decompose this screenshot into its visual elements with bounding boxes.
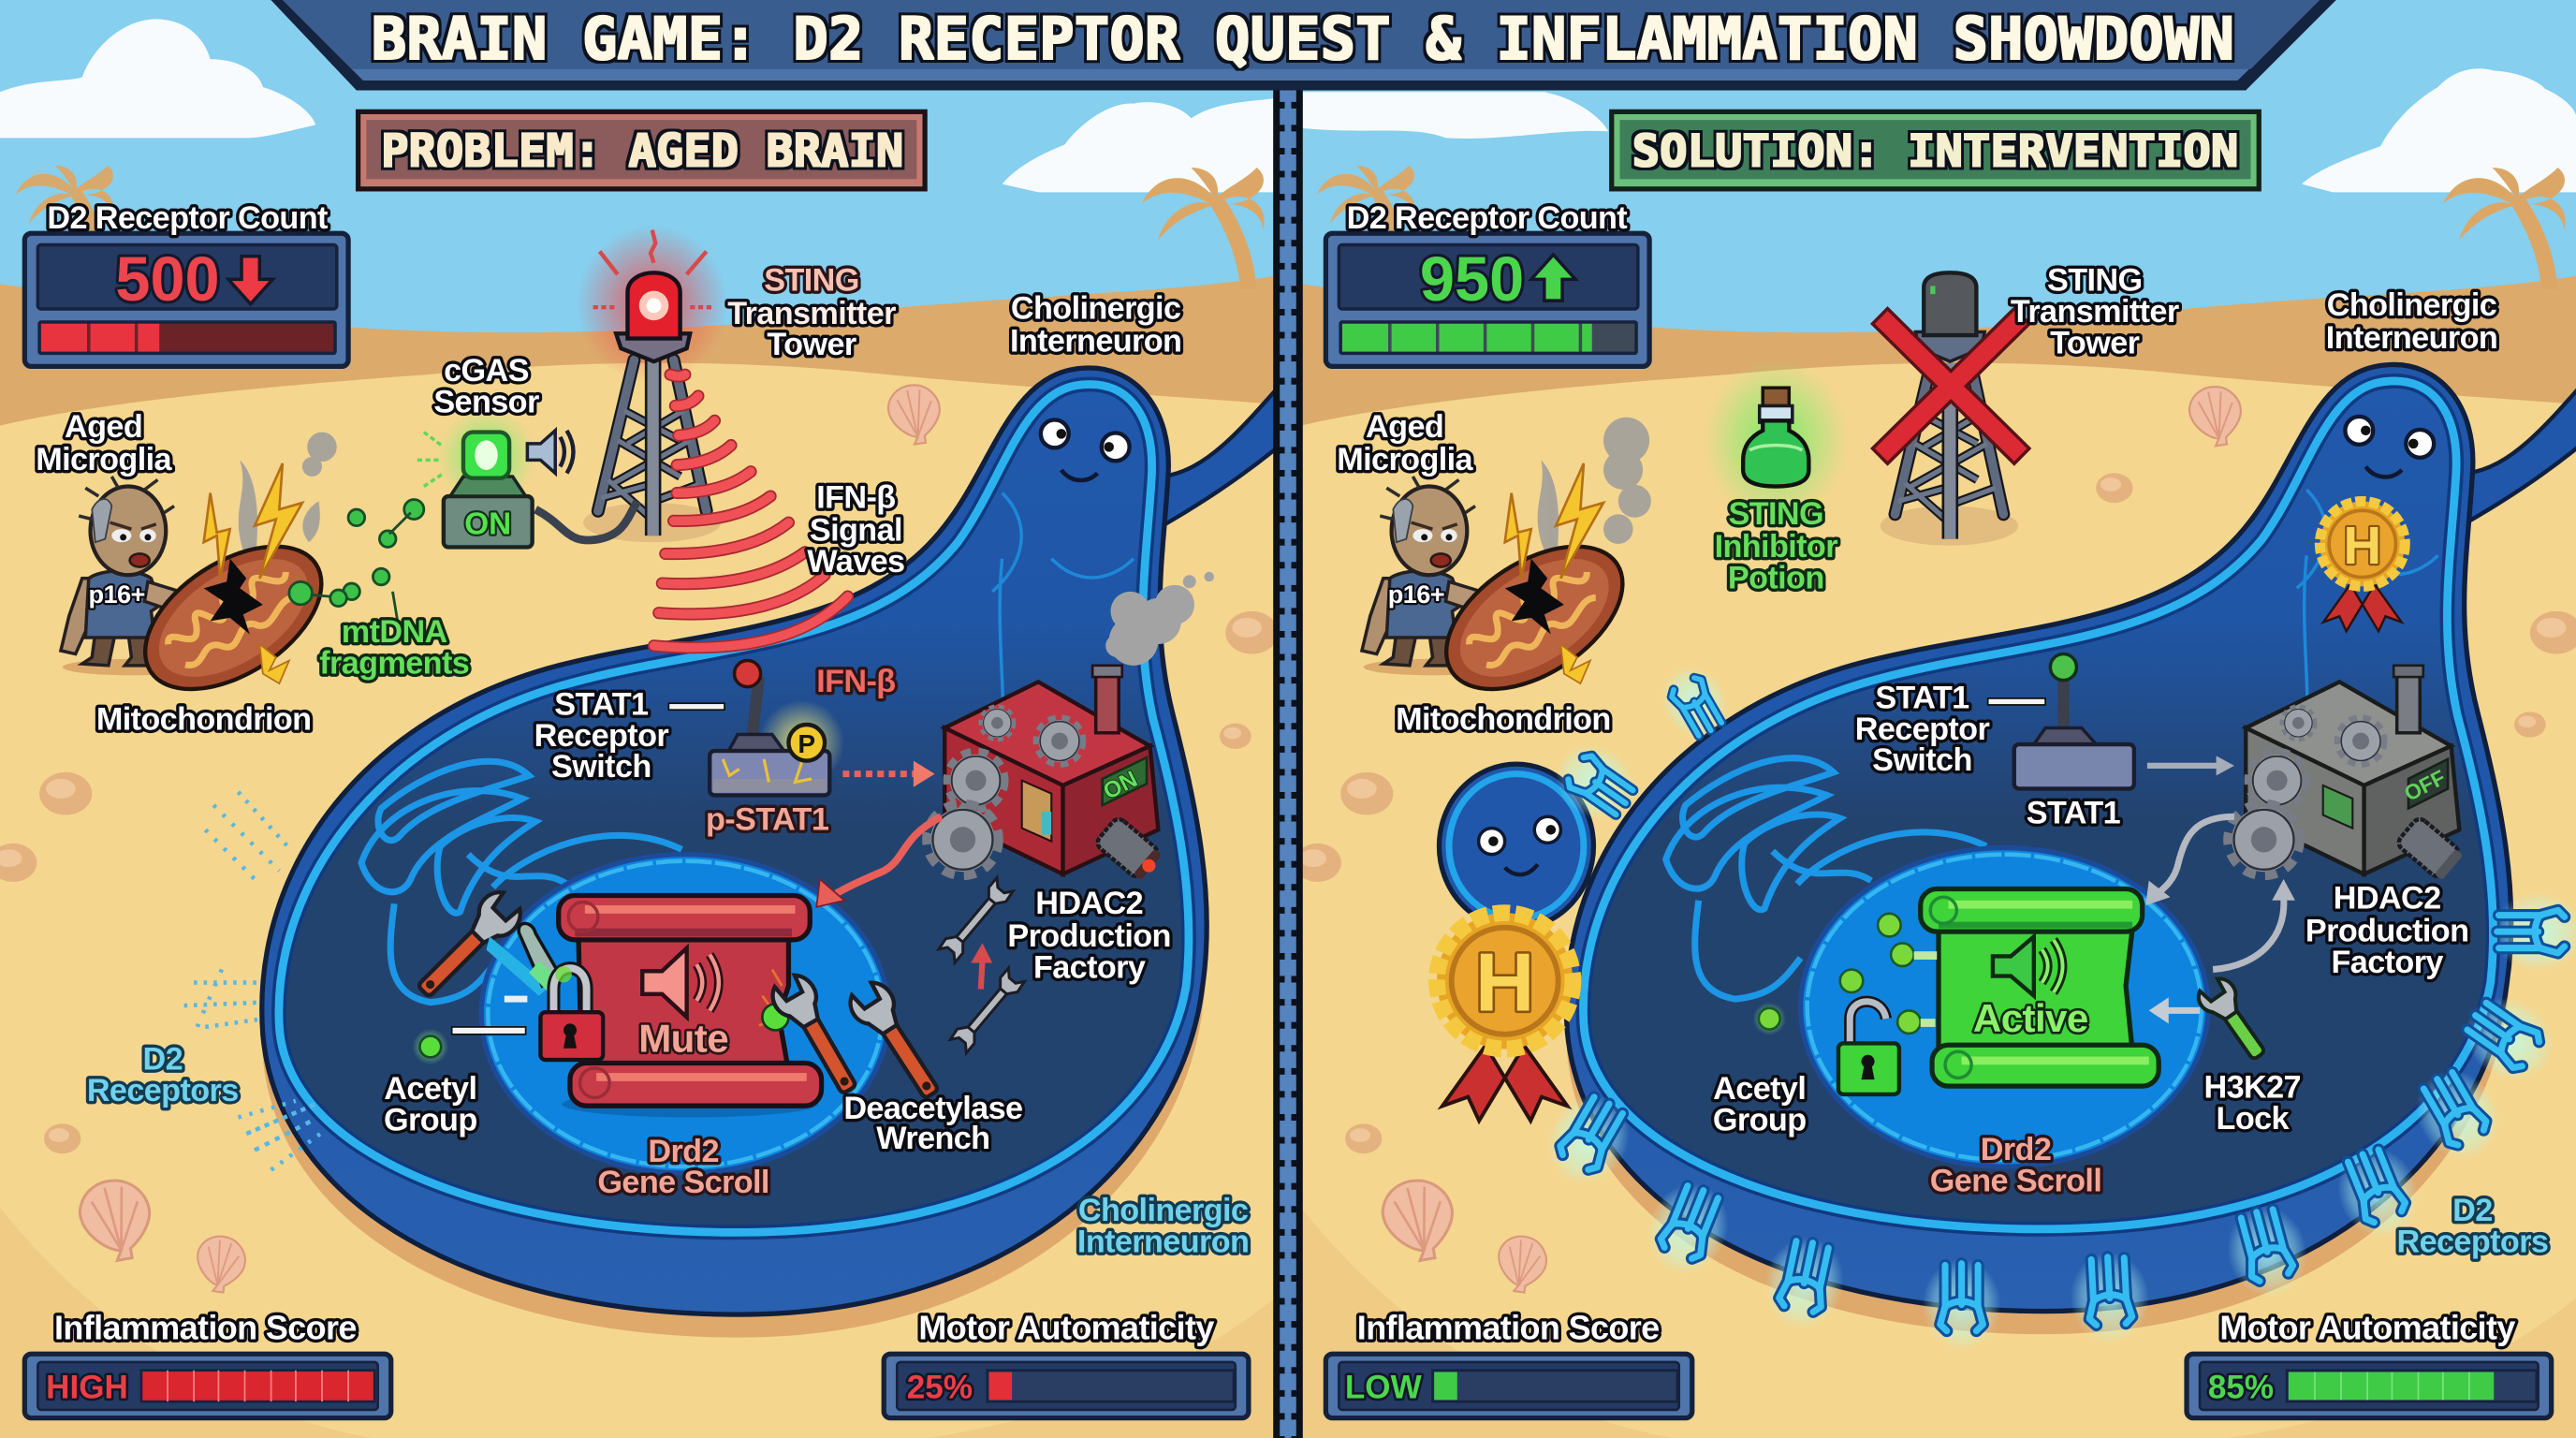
label: D2 receptors, left bbox=[87, 1042, 239, 1108]
label: cGAS sensor: cGAS bbox=[444, 353, 529, 389]
label: acetyl group, left: Group bbox=[384, 1103, 477, 1138]
label: IFN signal waves: IFN-β bbox=[816, 479, 896, 515]
shells and pebbles, right bbox=[1294, 384, 2576, 1295]
value: 950 bbox=[1420, 245, 1524, 315]
label: D2 receptors, right: Receptors bbox=[2397, 1224, 2548, 1259]
label: aged microglia, right: Aged bbox=[1366, 409, 1443, 445]
banner: solution bbox=[1612, 111, 2259, 189]
label: deacetylase wrench: Deacetylase bbox=[843, 1091, 1022, 1126]
smoke: left bbox=[239, 433, 337, 550]
D2 count panel: left bbox=[24, 233, 348, 366]
label: aged microglia, left: Microglia bbox=[36, 442, 172, 477]
up arrow bbox=[1531, 255, 1575, 301]
label: acetyl group, right: Group bbox=[1713, 1103, 1807, 1138]
small neuron: right bbox=[1439, 764, 1593, 929]
acetyl group dot: left bbox=[413, 1029, 448, 1064]
palm tree, left panel near bbox=[1142, 168, 1265, 289]
mitochondrion: right bbox=[1421, 463, 1647, 718]
label: STAT1 receptor switch, right: Receptor bbox=[1855, 712, 1989, 747]
level text: LOW bbox=[1345, 1370, 1423, 1406]
label: STING tower, right bbox=[2011, 263, 2179, 360]
section divider bbox=[1273, 82, 1303, 1438]
microglia character: right bbox=[1362, 477, 1501, 675]
label: cholinergic interneuron, left bottom: Interneuron bbox=[1077, 1224, 1249, 1259]
mitochondrion: left bbox=[120, 463, 346, 718]
label: STAT1 receptor switch, right: Switch bbox=[1872, 742, 1972, 778]
motor label: right: Motor Automaticity bbox=[2219, 1308, 2515, 1346]
STING tower deactivated: right bbox=[1881, 272, 2018, 546]
grey arrow STAT1 to factory bbox=[2147, 756, 2234, 775]
label: STAT1 receptor switch, right: STAT1 bbox=[1875, 680, 1969, 715]
label: H3K27 lock bbox=[2204, 1069, 2301, 1137]
label: cholinergic interneuron, left top bbox=[1010, 290, 1181, 360]
label: D2 receptors, left: D2 bbox=[142, 1042, 183, 1078]
label: IFN signal waves: Signal bbox=[810, 512, 902, 548]
title text: BRAIN GAME: D2 RECEPTOR QUEST & INFLAMMATION SHOWDOWN bbox=[372, 5, 2234, 73]
red arrow factory to scroll bbox=[816, 816, 942, 907]
medal on neuron body: small bbox=[2320, 501, 2405, 631]
HDAC2 factory: left bbox=[930, 572, 1214, 884]
level text: 85% bbox=[2208, 1370, 2274, 1406]
deacetylase wrench: inside bbox=[767, 970, 867, 1101]
label: STING tower, right: STING bbox=[2047, 263, 2143, 299]
label: p-STAT1: p-STAT1 bbox=[706, 801, 829, 837]
label: mitochondrion, right: Mitochondrion bbox=[1396, 701, 1611, 737]
label: H3K27 lock: H3K27 bbox=[2204, 1069, 2301, 1105]
label: cholinergic interneuron, left top: Interneuron bbox=[1010, 324, 1181, 360]
Mute label: Mute bbox=[638, 1016, 728, 1060]
green dot on scroll edge bbox=[762, 1004, 788, 1030]
label: STING tower, left: STING bbox=[764, 263, 859, 299]
STAT1 switch: left bbox=[710, 661, 844, 795]
motor gauge: left bbox=[884, 1354, 1249, 1418]
label: acetyl group, right bbox=[1713, 1071, 1807, 1138]
banner text: SOLUTION: INTERVENTION bbox=[1632, 125, 2238, 177]
label: cholinergic interneuron, left bottom: Cholinergic bbox=[1078, 1193, 1249, 1228]
dash: STAT1 label line right bbox=[1988, 698, 2045, 705]
label: cholinergic interneuron, right bbox=[2326, 287, 2497, 356]
label: deacetylase wrench bbox=[843, 1091, 1022, 1156]
label: cholinergic interneuron, left top: Cholinergic bbox=[1011, 290, 1181, 326]
label: mtDNA fragments: mtDNA bbox=[342, 614, 447, 650]
label: Drd2 gene scroll, left bbox=[597, 1134, 769, 1200]
small medal H: H bbox=[2344, 516, 2381, 575]
broken acetyl remover bbox=[487, 923, 562, 1003]
mtDNA fragments: left bbox=[289, 500, 424, 621]
label: mtDNA fragments: fragments bbox=[319, 646, 469, 682]
label: aged microglia, left: Aged bbox=[65, 409, 142, 445]
label: STING tower, left bbox=[727, 263, 896, 362]
motor label: left: Motor Automaticity bbox=[918, 1308, 1214, 1346]
open green padlock bbox=[1838, 1002, 1899, 1094]
shells and pebbles, left bbox=[0, 382, 1278, 1295]
dash: STAT1 label line left bbox=[668, 703, 724, 710]
cGAS sensor bbox=[417, 407, 637, 547]
label: HDAC2 factory, left bbox=[1007, 886, 1171, 985]
label: D2 receptors, right: D2 bbox=[2452, 1193, 2493, 1228]
clouds: left panel right side bbox=[1003, 98, 1273, 192]
label: HDAC2 factory, left: HDAC2 bbox=[1035, 886, 1143, 921]
label: STING inhibitor potion: STING bbox=[1729, 496, 1823, 532]
medal large bbox=[1437, 913, 1573, 1121]
acetyl groups active bbox=[1753, 914, 1937, 1035]
arrow to scroll bbox=[2149, 997, 2200, 1023]
label: STING tower, right: Transmitter bbox=[2011, 294, 2179, 330]
level text: 25% bbox=[907, 1370, 973, 1406]
palm tree, right panel far bbox=[1317, 166, 1415, 263]
dotted arrow p-STAT1 to factory bbox=[842, 761, 935, 787]
label: D2 receptors, left: Receptors bbox=[87, 1073, 239, 1108]
label: STING inhibitor potion: Inhibitor bbox=[1715, 529, 1837, 565]
label: aged microglia, left bbox=[36, 409, 172, 477]
factory ON sign: ON bbox=[1100, 767, 1142, 805]
D2 count label: left: D2 Receptor Count bbox=[47, 200, 328, 236]
label: STING inhibitor potion: Potion bbox=[1728, 560, 1824, 595]
STING tower: left bbox=[577, 225, 728, 542]
banner: problem bbox=[359, 111, 925, 189]
grey arrow factory to scroll bbox=[2145, 816, 2234, 905]
large medal H: H bbox=[1475, 936, 1534, 1028]
D2 count panel: right bbox=[1325, 233, 1649, 366]
cholinergic interneuron cell: right bbox=[1566, 361, 2576, 1334]
inflammation label: left: Inflammation Score bbox=[54, 1308, 357, 1346]
label: Drd2 gene scroll, right: Drd2 bbox=[1981, 1132, 2051, 1167]
level text: HIGH bbox=[46, 1370, 128, 1406]
label: cholinergic interneuron, right: Cholinergic bbox=[2327, 287, 2497, 323]
D2 receptors glowing: right bbox=[1531, 654, 2576, 1351]
label: Drd2 gene scroll, left: Gene Scroll bbox=[597, 1165, 769, 1200]
label: HDAC2 factory, right: Factory bbox=[2332, 945, 2443, 980]
label: mtDNA fragments bbox=[319, 614, 469, 682]
label: IFN signal waves: Waves bbox=[807, 544, 904, 580]
palm tree, left panel far bbox=[16, 166, 114, 263]
cholinergic interneuron cell: left bbox=[262, 365, 1298, 1338]
left panel background bbox=[0, 0, 1275, 1438]
clouds: left panel bbox=[0, 19, 315, 138]
left wrench bbox=[408, 887, 527, 1005]
label: D2 receptors, right bbox=[2397, 1193, 2548, 1259]
clouds: right panel right side bbox=[2302, 68, 2576, 192]
nucleus: left bbox=[481, 855, 889, 1173]
label: Drd2 gene scroll, right: Gene Scroll bbox=[1930, 1163, 2101, 1198]
inflammation gauge: left bbox=[24, 1354, 391, 1418]
label: HDAC2 factory, right: HDAC2 bbox=[2334, 881, 2441, 917]
banner text: PROBLEM: AGED BRAIN bbox=[381, 125, 903, 177]
label: HDAC2 factory, right: Production bbox=[2305, 914, 2468, 949]
label: cholinergic interneuron, left bottom bbox=[1077, 1193, 1249, 1259]
inflammation label: right: Inflammation Score bbox=[1357, 1308, 1660, 1346]
motor gauge: right bbox=[2187, 1354, 2552, 1418]
label: IFN signal waves bbox=[807, 479, 904, 580]
inflammation gauge: right bbox=[1325, 1354, 1692, 1418]
label: STAT1 receptor switch, left bbox=[534, 686, 668, 785]
dash: acetyl line left bbox=[452, 1027, 526, 1034]
label: STING tower, right: Tower bbox=[2050, 325, 2140, 360]
Drd2 gene scroll: active bbox=[1921, 889, 2159, 1086]
down arrow bbox=[228, 257, 272, 304]
p16 label: left: p16+ bbox=[88, 580, 145, 609]
Active label: Active bbox=[1973, 996, 2088, 1040]
label: aged microglia, right: Microglia bbox=[1337, 442, 1474, 477]
microglia character: left bbox=[61, 477, 200, 675]
label: HDAC2 factory, left: Production bbox=[1007, 918, 1171, 954]
label: cholinergic interneuron, right: Interneuron bbox=[2326, 320, 2497, 356]
label: HDAC2 factory, right bbox=[2305, 881, 2468, 980]
value: 500 bbox=[115, 245, 220, 315]
signal waves bbox=[654, 374, 848, 648]
grey arrow wrench to factory bbox=[2213, 879, 2295, 970]
D2 receptors fading: left bbox=[184, 792, 320, 1170]
clouds: right panel bbox=[1303, 92, 1608, 139]
right panel background bbox=[1301, 0, 2576, 1438]
Drd2 gene scroll: problem bbox=[559, 896, 822, 1117]
H3K27 wrench bbox=[2194, 974, 2275, 1066]
label: acetyl group, left: Acetyl bbox=[384, 1071, 476, 1107]
label: acetyl group, left bbox=[384, 1071, 477, 1138]
label: mitochondrion, left: Mitochondrion bbox=[96, 701, 311, 737]
red padlock bbox=[540, 966, 603, 1060]
label: H3K27 lock: Lock bbox=[2217, 1101, 2291, 1137]
label: STAT1 receptor switch, right bbox=[1855, 680, 1989, 778]
potion bbox=[1704, 359, 1848, 522]
smoke: right bbox=[1538, 418, 1651, 550]
title banner bbox=[268, 0, 2339, 91]
label: STING tower, left: Tower bbox=[767, 327, 856, 362]
label: Drd2 gene scroll, right bbox=[1930, 1132, 2101, 1198]
STAT1 switch: right bbox=[2014, 654, 2134, 788]
factory OFF sign: OFF bbox=[2400, 765, 2450, 806]
D2 count label: right: D2 Receptor Count bbox=[1347, 200, 1627, 236]
red X on tower bbox=[1888, 324, 2014, 448]
label: STING tower, left: Transmitter bbox=[727, 296, 896, 331]
label: Drd2 gene scroll, left: Drd2 bbox=[648, 1134, 719, 1169]
HDAC2 factory: right bbox=[2232, 666, 2465, 882]
label: HDAC2 factory, left: Factory bbox=[1033, 949, 1146, 985]
label: acetyl group, right: Acetyl bbox=[1713, 1071, 1806, 1107]
label: STAT1 receptor switch, left: STAT1 bbox=[554, 686, 649, 722]
label: STAT1 receptor switch, left: Receptor bbox=[534, 718, 668, 754]
label: STING inhibitor potion bbox=[1715, 496, 1837, 595]
small wrench top bbox=[938, 877, 1014, 962]
label: STAT1 receptor switch, left: Switch bbox=[551, 749, 651, 785]
deacetylase wrench: outside bbox=[844, 977, 949, 1107]
label: IFN-β: IFN-β bbox=[816, 664, 896, 699]
cGAS ON label: ON bbox=[464, 506, 511, 541]
palm tree, right panel near bbox=[2443, 168, 2566, 289]
label: cGAS sensor bbox=[433, 353, 539, 420]
nucleus: right bbox=[1801, 848, 2208, 1167]
label: aged microglia, right bbox=[1337, 409, 1474, 477]
small wrench bottom bbox=[949, 968, 1026, 1053]
p16 label: right: p16+ bbox=[1388, 580, 1444, 609]
label: STAT1: STAT1 bbox=[2027, 795, 2121, 830]
P badge letter: P bbox=[798, 729, 815, 758]
small red up arrow bbox=[971, 943, 992, 990]
label: cGAS sensor: Sensor bbox=[433, 385, 539, 420]
label: deacetylase wrench: Wrench bbox=[876, 1121, 989, 1156]
